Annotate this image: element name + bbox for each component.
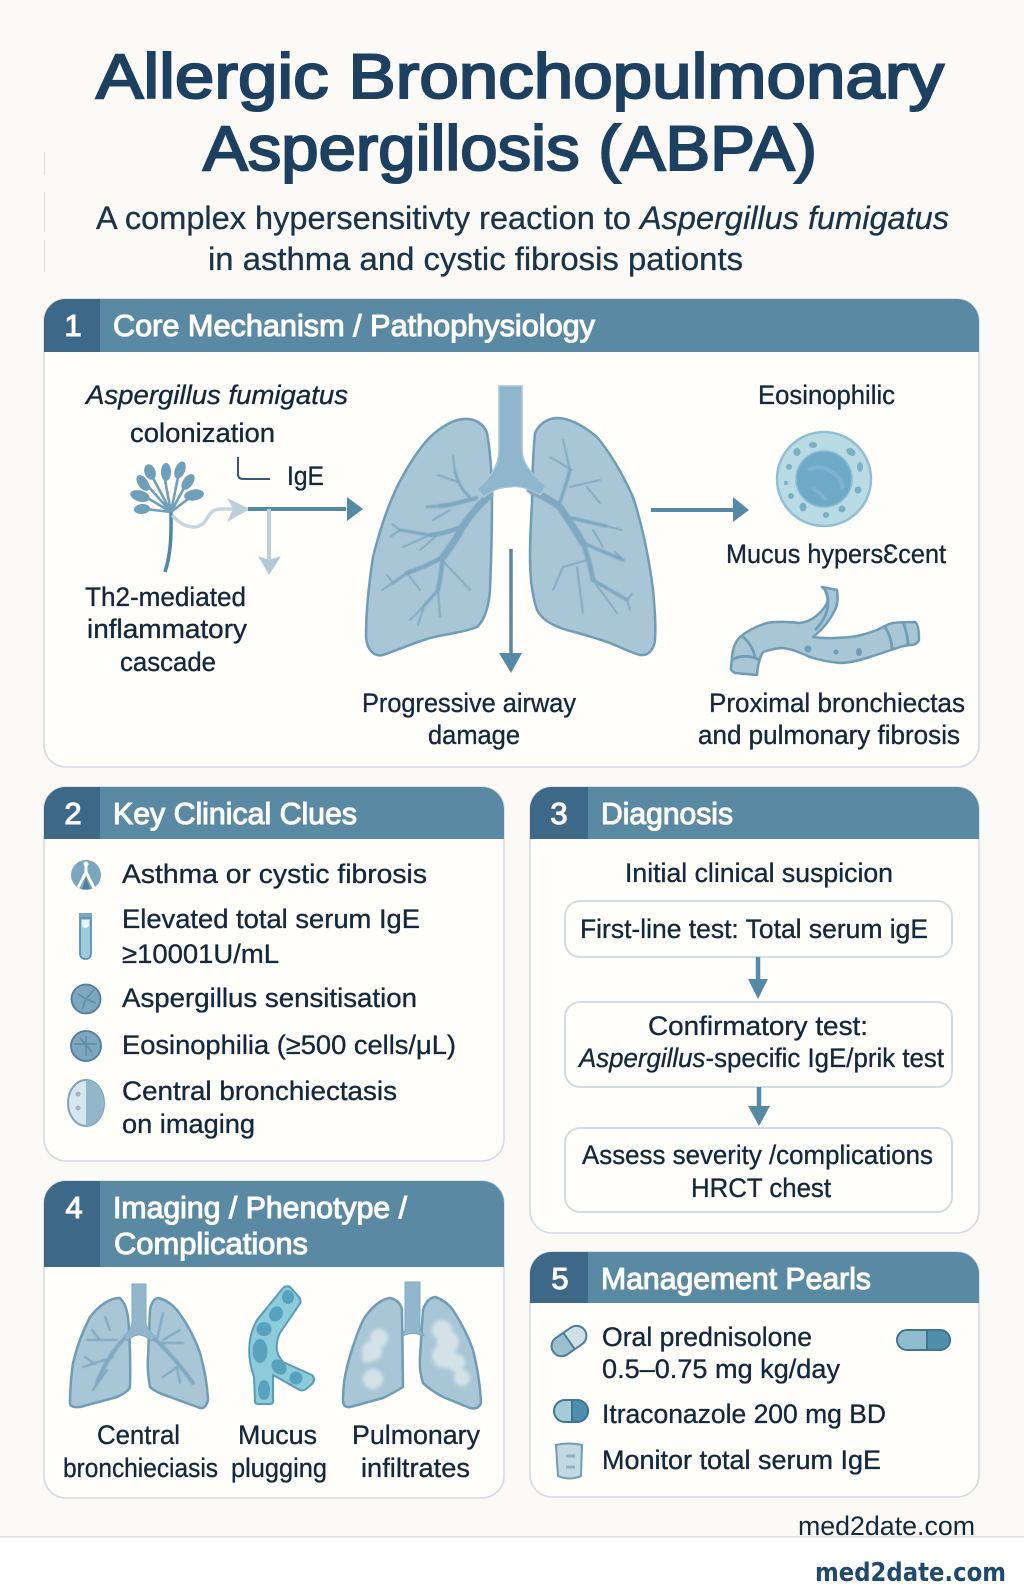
icon: test tube [79, 913, 92, 959]
panel: diagnosis [530, 787, 979, 1233]
icon: eosinophilia [71, 1031, 101, 1061]
header: imaging phenotype complications: 4 [65, 1190, 83, 1225]
text: initial suspicion: Initial clinical suspicion [625, 858, 893, 888]
header: diagnosis: Diagnosis [601, 796, 733, 831]
label: Th2 cascade: inflammatory [87, 614, 248, 644]
panel: imaging phenotype complications [44, 1181, 504, 1498]
step: confirmatory test: Confirmatory test: [648, 1011, 868, 1041]
labels: imaging findings: bronchieciasis [63, 1453, 218, 1483]
header: management pearls: Management Pearls [601, 1261, 871, 1296]
header: management pearls [530, 1252, 979, 1303]
title: Allergic Bronchopulmonary [96, 42, 945, 112]
label: airway damage [362, 688, 576, 750]
text: central bronchiectasis: on imaging [122, 1109, 255, 1139]
header: key clinical clues: Key Clinical Clues [113, 796, 357, 831]
icon: imaging scan [68, 1080, 104, 1126]
labels: imaging findings: Central [97, 1420, 180, 1450]
step: severity assessment [565, 1128, 952, 1212]
subtitle [96, 200, 949, 277]
header: diagnosis [530, 787, 979, 839]
header: imaging phenotype complications: Complications [114, 1226, 308, 1261]
labels: imaging findings: plugging [231, 1453, 327, 1483]
label: eosinophilic: Eosinophilic [758, 380, 895, 410]
panel: core mechanism [44, 299, 979, 767]
icon: half pill [554, 1400, 588, 1422]
label: bronchiectasis and fibrosis [698, 688, 965, 750]
step: confirmatory test: Aspergillus-specific IgE/prik test [577, 1043, 944, 1073]
text: elevated IgE: Elevated total serum IgE [122, 904, 420, 934]
text: oral prednisolone: Oral prednisolone [602, 1322, 812, 1352]
label: bronchiectasis and fibrosis: Proximal bronchiectas [709, 688, 965, 718]
text: monitor IgE: Monitor total serum IgE [602, 1445, 881, 1475]
icon: central bronchiectasis lungs [70, 1284, 208, 1408]
title: Aspergillosis (ABPA) [203, 114, 817, 184]
icon: pulmonary infiltrates lungs [343, 1282, 481, 1408]
label: Th2 cascade: cascade [120, 647, 216, 677]
subtitle: in asthma and cystic fibrosis pationts [208, 241, 743, 277]
label: colonization: Aspergillus fumigatus [84, 380, 348, 410]
arrow: down to Th2 cascade [258, 509, 281, 575]
label: airway damage: damage [428, 720, 520, 750]
panel: key clinical clues [44, 787, 504, 1161]
label: colonization: colonization [130, 418, 275, 448]
step: first-line test: First-line test: Total serum igE [580, 914, 928, 944]
label: airway damage: Progressive airway [362, 688, 576, 718]
label: IgE: IgE [287, 461, 324, 491]
icon: airway [71, 860, 101, 890]
panel: management pearls [530, 1252, 979, 1497]
illustration: lungs [366, 386, 655, 655]
subtitle: A complex hypersensitivty reaction to Aspergillus fumigatus [96, 200, 949, 236]
header: imaging phenotype complications [44, 1181, 504, 1267]
label: mucus: Mucus hypersƐcent [726, 539, 946, 569]
icon: dilated bronchus [731, 587, 919, 675]
icon: mucus plugging [249, 1286, 314, 1404]
labels: imaging findings: Mucus [238, 1420, 317, 1450]
header: imaging phenotype complications: Imaging / Phenotype / [113, 1190, 407, 1225]
text: oral prednisolone: 0.5–0.75 mg kg/day [602, 1354, 840, 1384]
text: elevated IgE: ≥10001U/mL [122, 939, 279, 969]
title [96, 42, 945, 184]
step: first-line test [565, 901, 952, 957]
label: colonization [84, 380, 348, 448]
footer band [0, 1536, 1024, 1590]
step: confirmatory test [565, 1002, 952, 1087]
header: management pearls: 5 [551, 1261, 569, 1296]
arrow: lungs to eosinophil [651, 497, 749, 522]
arrow: colonization to lungs [172, 497, 363, 527]
text: asthma or cystic fibrosis: Asthma or cystic fibrosis [122, 859, 427, 889]
label: Th2 cascade [85, 582, 248, 677]
icon: sample cup [556, 1444, 582, 1478]
icon: sensitisation [72, 984, 100, 1014]
header: core mechanism: Core Mechanism / Pathophysiology [113, 308, 595, 343]
text: elevated IgE [122, 904, 420, 969]
text: site credit: med2date.com [798, 1511, 975, 1541]
icon: eosinophil cell [777, 432, 871, 526]
header: key clinical clues: 2 [64, 796, 82, 831]
bracket: IgE connector [238, 457, 270, 479]
header: diagnosis: 3 [550, 796, 568, 831]
step: severity assessment: Assess severity /complications [582, 1140, 933, 1170]
icon: tablet [548, 1322, 590, 1360]
text: central bronchiectasis: Central bronchiectasis [122, 1076, 397, 1106]
text: eosinophilia: Eosinophilia (≥500 cells/μL) [122, 1030, 456, 1060]
icon: aspergillus fungus [129, 460, 205, 572]
text: oral prednisolone [602, 1322, 840, 1384]
header: core mechanism [44, 299, 979, 352]
text: aspergillus sensitisation: Aspergillus sensitisation [122, 983, 417, 1013]
icon: capsule [897, 1330, 950, 1350]
text: central bronchiectasis [122, 1076, 397, 1139]
text: itraconazole: Itraconazole 200 mg BD [602, 1399, 886, 1429]
labels: imaging findings [63, 1420, 480, 1483]
label: Th2 cascade: Th2-mediated [85, 582, 246, 612]
header: key clinical clues [44, 787, 504, 839]
labels: imaging findings: infiltrates [361, 1453, 470, 1483]
label: bronchiectasis and fibrosis: and pulmonary fibrosis [698, 720, 960, 750]
step: severity assessment: HRCT chest [691, 1173, 831, 1203]
arrow: first-line to confirmatory [748, 957, 768, 999]
header: core mechanism: 1 [64, 308, 82, 343]
labels: imaging findings: Pulmonary [352, 1420, 480, 1450]
arrow: lungs to airway damage [499, 549, 522, 673]
arrow: confirmatory to severity [748, 1087, 770, 1126]
